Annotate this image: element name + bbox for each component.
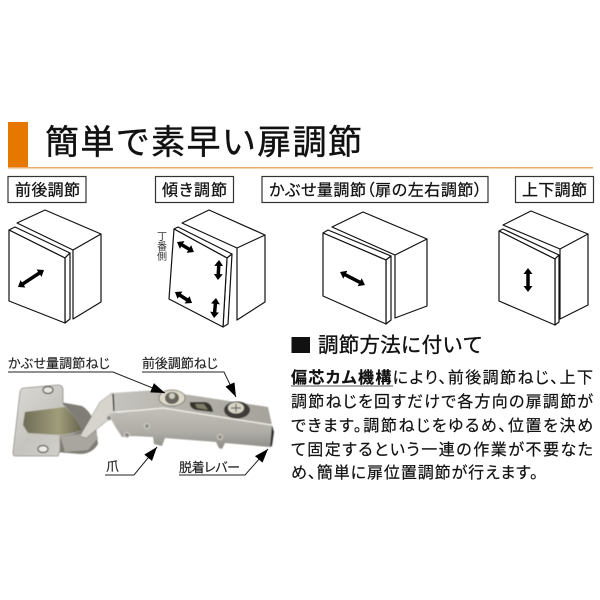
text: hinge side note: 側	[157, 250, 167, 263]
plate screw holes	[38, 386, 53, 452]
title accent bar	[8, 122, 28, 168]
callout: front-back screw	[142, 356, 236, 397]
hinge cup	[55, 402, 98, 454]
heading square	[292, 337, 310, 353]
label: 傾き調節: 傾き調節	[162, 182, 227, 200]
title block	[8, 122, 593, 168]
body ridge highlight	[116, 408, 272, 425]
text: hinge side note: 丁	[157, 232, 167, 243]
label: かぶせ量調節: かぶせ量調節（扉の左右調節）	[269, 182, 482, 200]
diagram: tilt adjustment cube	[169, 210, 265, 327]
section heading	[292, 334, 483, 357]
body text: て固定するという一連の作業が不要なた	[291, 441, 593, 459]
rivets	[106, 416, 222, 440]
callout: overlay screw	[8, 356, 165, 393]
hinge body top	[112, 390, 272, 425]
label: 上下調節	[516, 176, 594, 202]
photo: concealed hinge	[13, 385, 274, 456]
body text: できます。調節ねじをゆるめ、位置を決め	[291, 417, 593, 435]
callout: overlay screw: かぶせ量調節ねじ	[8, 356, 110, 371]
callout: release lever: 脱着レバー	[179, 460, 240, 475]
label: 前後調節: 前後調節	[15, 182, 80, 200]
callout: claw: 爪	[106, 459, 119, 474]
callout: claw	[105, 447, 157, 475]
hinge body side	[108, 408, 273, 449]
body text: め、簡単に扉位置調節が行えます。	[291, 464, 538, 482]
title: 簡単で素早い扉調節	[45, 124, 362, 162]
label: 上下調節: 上下調節	[522, 182, 587, 200]
body text	[291, 368, 593, 482]
hinge mounting plate	[13, 385, 82, 456]
body text: 偏芯カム機構により、前後調節ねじ、上下	[291, 368, 593, 387]
diagram: overlay adjustment cube	[323, 212, 427, 324]
body text: 調節ねじを回すだけで各方向の扉調節が	[291, 393, 593, 411]
overlay adjustment screw	[159, 390, 185, 406]
label: かぶせ量調節	[262, 176, 488, 202]
label: 傾き調節	[156, 176, 234, 202]
front-back adjustment screw	[224, 402, 250, 418]
heading text: 調節方法に付いて	[318, 334, 483, 357]
callout: front-back screw: 前後調節ねじ	[142, 356, 218, 371]
label: 前後調節	[8, 176, 86, 202]
arm pivot line	[113, 394, 114, 411]
text: hinge side note: 番	[157, 241, 167, 253]
cam slot	[190, 402, 213, 412]
diagram: front-back adjustment cube	[9, 210, 101, 323]
title underline	[8, 167, 593, 168]
body end cap	[270, 425, 274, 447]
diagram: up-down adjustment cube	[499, 211, 588, 325]
hinge arm	[80, 393, 120, 438]
plate window	[23, 407, 82, 435]
hinge lower link	[60, 428, 98, 452]
callout: release lever	[179, 449, 268, 475]
